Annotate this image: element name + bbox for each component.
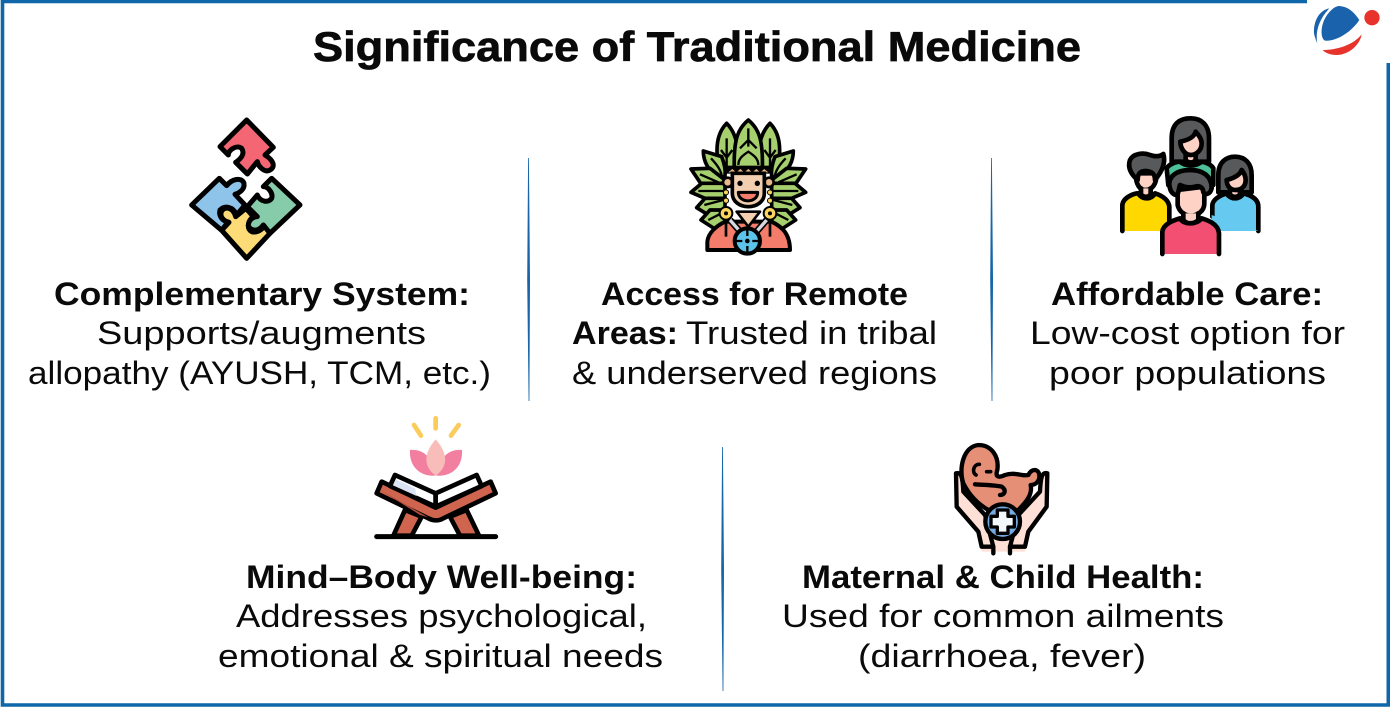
text: affordable care: Low-cost option for [1030,315,1345,351]
icon: group of people [1122,118,1258,254]
text: affordable care [1030,276,1345,391]
icon: baby held in hands [956,445,1047,553]
text: maternal and child health [782,559,1224,674]
logo [1314,6,1380,55]
text: mind-body well-being: Addresses psychological, [236,598,647,634]
text: access for remote areas: Trusted in tribal [686,315,937,351]
text: access for remote areas: Areas: [572,315,678,351]
text: complementary system: Supports/augments [97,315,426,351]
text: maternal and child health: Maternal & Child Health: [802,559,1204,595]
text: complementary system [28,276,491,391]
icon: open book with lotus [377,418,496,537]
text: access for remote areas: & underserved regions [572,355,937,391]
text: complementary system: allopathy (AYUSH, TCM, etc.) [28,355,491,391]
text: affordable care: Affordable Care: [1051,276,1323,312]
text: mind-body well-being [218,559,663,674]
icon: tribal chief with feather headdress [691,120,806,254]
title: Significance of Traditional Medicine [313,23,1081,70]
text: affordable care: poor populations [1049,355,1326,391]
text: maternal and child health: Used for common ailments [782,598,1224,634]
text: complementary system: Complementary System: [54,276,470,312]
text: maternal and child health: (diarrhoea, fever) [858,638,1146,674]
text: access for remote areas: Access for Remote [601,276,908,312]
text: mind-body well-being: Mind–Body Well-being: [246,559,637,595]
icon: puzzle pieces [192,120,300,258]
text: access for remote areas [572,276,937,391]
text: mind-body well-being: emotional & spiritual needs [218,638,663,674]
